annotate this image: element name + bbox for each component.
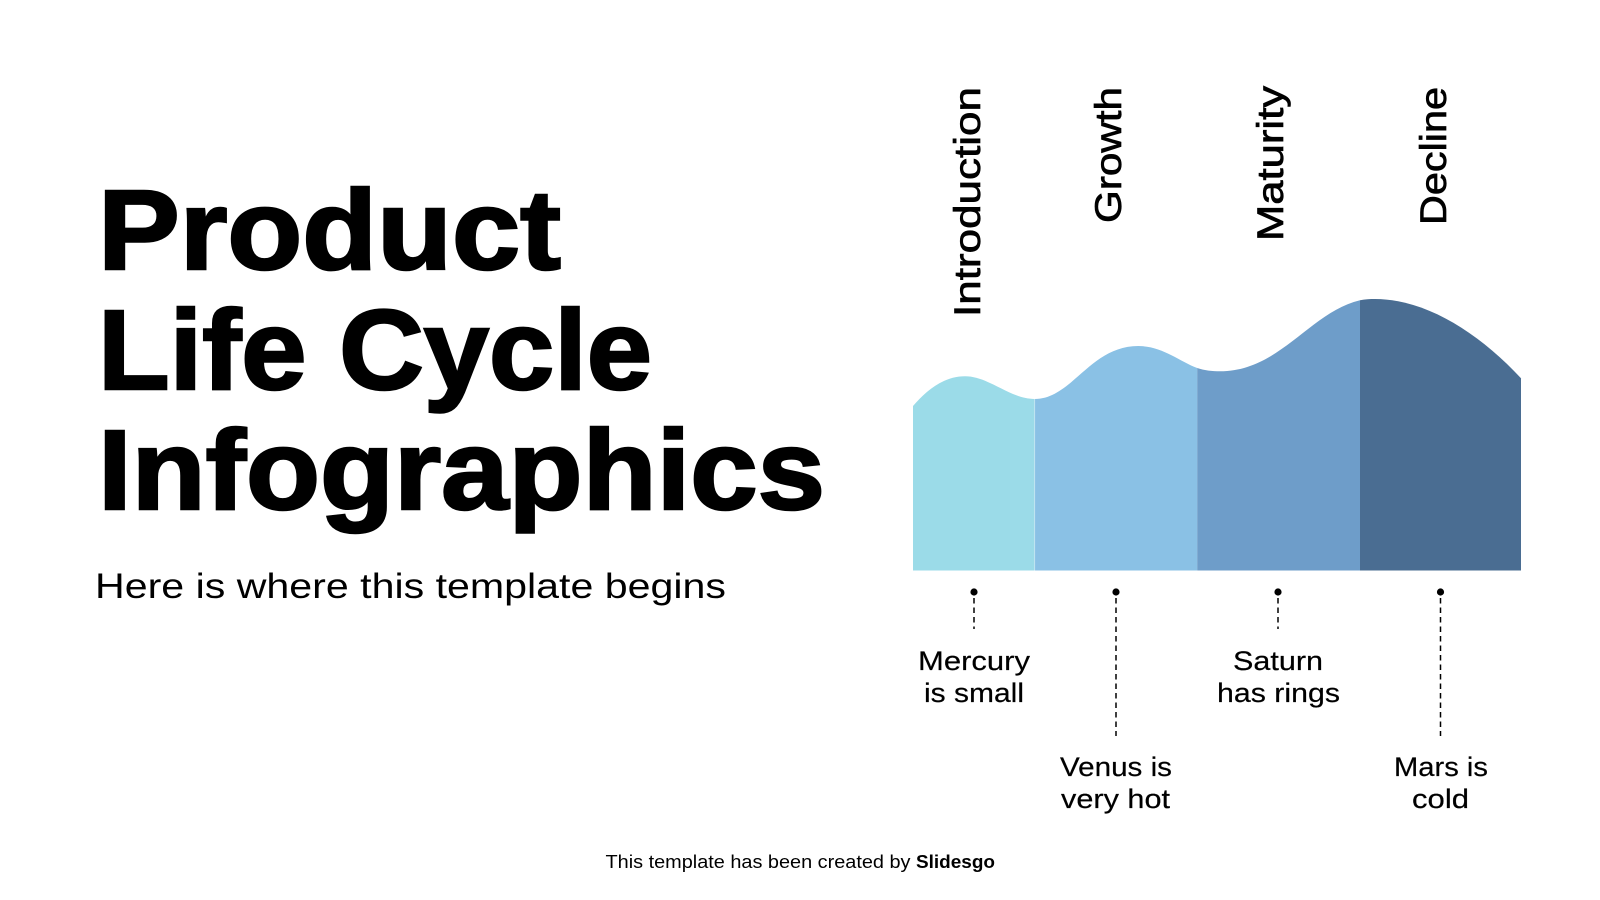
text: Saturn: Saturn [1233,646,1323,676]
segment: decline [1360,299,1521,570]
subtitle: Here is where this template begins [95,567,726,606]
text: Mercury: Mercury [918,646,1031,676]
label: Maturity: Maturity [1250,85,1291,241]
stage labels [947,85,1454,317]
text: Venus: Venus is [1060,752,1172,782]
footer credit: This template has been created by [606,852,910,872]
text: Venus [1060,752,1172,814]
segment: growth [1035,346,1197,570]
title: Infographics [98,407,825,533]
title: Life Cycle [98,287,652,413]
text: Mercury [918,646,1031,708]
text: Mars [1394,752,1488,814]
leader: Mars [1437,588,1444,736]
label: Decline: Decline [1413,87,1454,225]
leader: Mercury [970,588,978,629]
segment: introduction [913,376,1035,570]
footer credit: Slidesgo [916,852,995,872]
leader: Venus [1112,588,1120,736]
text: Mars: Mars is [1394,752,1488,782]
text: Saturn [1217,646,1340,708]
text: Mercury: is small [924,678,1024,708]
title: Product [98,167,561,293]
label: Introduction: Introduction [947,87,988,317]
text: Mars: cold [1412,784,1469,814]
label: Growth: Growth [1088,87,1129,223]
text: Saturn: has rings [1217,678,1340,708]
title [98,167,825,533]
life cycle area chart [913,299,1521,570]
text: Venus: very hot [1061,784,1171,814]
segment: maturity [1197,300,1360,570]
leader: Saturn [1274,588,1282,629]
